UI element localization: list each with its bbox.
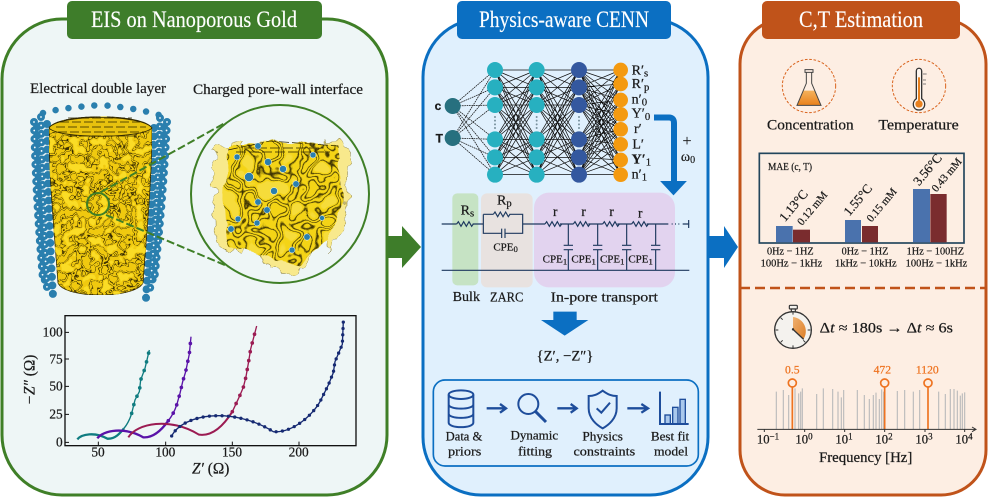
component labels: r bbox=[581, 204, 586, 219]
axis tick labels: 10 bbox=[875, 433, 888, 447]
bar value labels bbox=[776, 151, 945, 224]
icon: magnifier bbox=[518, 394, 546, 422]
output labels: Y′ bbox=[632, 107, 645, 122]
output labels: 0 bbox=[645, 112, 650, 123]
heading: EIS on Nanoporous Gold bbox=[67, 1, 322, 39]
panel: physics-aware CENN bbox=[423, 1, 708, 495]
region names: ZARC bbox=[490, 290, 523, 305]
arrow: circuit to impedance bbox=[541, 312, 588, 336]
axis tick labels: 3 bbox=[928, 431, 933, 441]
bars: concentration error bbox=[793, 194, 947, 242]
region: ZARC bbox=[481, 193, 533, 287]
hidden layer 2 bbox=[529, 62, 545, 183]
axis tick labels: 4 bbox=[968, 431, 973, 441]
output labels: 1 bbox=[646, 158, 651, 169]
arrow bbox=[627, 404, 648, 413]
output labels: R′ bbox=[632, 63, 644, 78]
axis tick labels: 150 bbox=[222, 445, 242, 460]
hidden layer 1 bbox=[487, 62, 503, 183]
axis tick labels: 25 bbox=[49, 407, 63, 422]
axis tick labels: 100 bbox=[155, 445, 176, 460]
workflow labels: priors bbox=[448, 445, 481, 459]
axis tick labels: 2 bbox=[888, 431, 893, 441]
frequency axis bbox=[757, 427, 976, 432]
workflow labels: Physics bbox=[582, 429, 623, 443]
output labels: 0 bbox=[642, 98, 647, 109]
panel: EIS on nanoporous gold bbox=[2, 1, 387, 495]
equivalent circuit: CPE bbox=[543, 254, 563, 266]
chart x labels: 0Hz − 1HZ bbox=[842, 246, 888, 257]
component labels: r bbox=[553, 204, 558, 219]
axis tick labels: 10 bbox=[835, 433, 848, 447]
workflow labels bbox=[446, 429, 690, 459]
arrow: outputs to circuit bbox=[654, 118, 680, 191]
output labels: r′ bbox=[634, 122, 642, 137]
chart x labels: 100Hz − 1kHz bbox=[906, 258, 968, 269]
output labels: R′ bbox=[632, 77, 644, 92]
icon: flask bbox=[782, 59, 836, 113]
axis tick labels bbox=[43, 325, 309, 460]
MAE bar chart: 0.12 mM bbox=[795, 189, 830, 228]
bar value labels: 1.55°C bbox=[840, 181, 875, 219]
component labels: R bbox=[497, 193, 506, 208]
chart x labels: 1Hz − 100HZ bbox=[907, 246, 964, 257]
icon: shield bbox=[589, 391, 617, 428]
fitting workflow bbox=[433, 380, 698, 466]
curve: teal bbox=[77, 350, 149, 439]
axis tick labels: 10 bbox=[955, 433, 968, 447]
label: concentration: Concentration bbox=[767, 118, 854, 134]
component labels: p bbox=[506, 198, 512, 209]
label: impedance output: {Z′, −Z″} bbox=[537, 348, 593, 364]
inset: charged pore-wall interface bbox=[191, 105, 369, 283]
selected frequency labels: 0.5 bbox=[785, 364, 800, 377]
axis tick labels: 200 bbox=[289, 445, 309, 460]
axis tick labels: 1 bbox=[848, 431, 853, 441]
axis tick labels: 0 bbox=[56, 435, 63, 450]
label: plus omega zero: + bbox=[682, 133, 692, 150]
nanoporous gold cylinder with ions bbox=[34, 105, 167, 298]
chart x labels bbox=[761, 246, 968, 269]
input labels bbox=[435, 99, 444, 145]
output labels: n′ bbox=[632, 167, 642, 182]
curve: crimson bbox=[128, 326, 257, 437]
label: plus omega zero bbox=[681, 133, 695, 166]
equivalent circuit: 1 bbox=[620, 256, 624, 266]
axis tick labels: 10 bbox=[757, 433, 770, 447]
selected frequency labels: 472 bbox=[874, 364, 891, 377]
component labels: R bbox=[461, 204, 470, 219]
chart x labels: 1kHz − 10kHz bbox=[835, 258, 897, 269]
axis title: Frequency [Hz] bbox=[819, 450, 912, 466]
region: bulk bbox=[452, 193, 478, 285]
region names bbox=[453, 290, 658, 306]
label: electrical double layer: Electrical double layer bbox=[30, 81, 166, 97]
axis tick labels: 10 bbox=[795, 433, 808, 447]
axis tick labels: −1 bbox=[770, 431, 779, 441]
workflow labels: model bbox=[654, 445, 689, 459]
heading: Physics-aware CENN bbox=[457, 1, 671, 39]
selected frequency labels bbox=[785, 364, 939, 377]
component labels: r bbox=[609, 204, 614, 219]
input labels: T bbox=[436, 131, 444, 145]
equivalent circuit: CPE bbox=[493, 241, 513, 253]
equivalent circuit: CPE bbox=[628, 254, 648, 266]
region: in-pore transport bbox=[534, 193, 675, 287]
equivalent circuit bbox=[442, 193, 689, 364]
bar value labels: 1.13°C bbox=[776, 187, 811, 224]
axis tick labels: 100 bbox=[43, 325, 63, 340]
equivalent circuit: 0 bbox=[513, 244, 518, 254]
input labels: c bbox=[435, 99, 442, 113]
output labels: n′ bbox=[632, 92, 642, 107]
equivalent circuit: CPE bbox=[600, 254, 620, 266]
workflow labels: constraints bbox=[573, 445, 635, 459]
label: plus omega zero: 0 bbox=[690, 155, 695, 166]
icon: bar chart bbox=[660, 392, 689, 424]
selected frequency stems bbox=[788, 379, 932, 429]
arrow bbox=[557, 404, 577, 413]
axis tick labels: 50 bbox=[49, 379, 63, 394]
component labels bbox=[461, 193, 643, 221]
equivalent circuit: 1 bbox=[563, 256, 567, 266]
Nyquist plot bbox=[21, 316, 356, 477]
output labels: 1 bbox=[642, 173, 647, 184]
label: measurement time reduction: Δt ≈ 180s → Δt ≈ 6s bbox=[820, 320, 953, 336]
input nodes bbox=[445, 98, 461, 146]
axis tick labels bbox=[757, 431, 973, 447]
output nodes bbox=[613, 63, 628, 182]
region names: Bulk bbox=[453, 290, 480, 305]
y axis label: −Z″ (Ω) bbox=[21, 355, 38, 405]
heading: C,T Estimation bbox=[762, 1, 960, 39]
component labels: r bbox=[638, 206, 643, 221]
panel: C,T estimation bbox=[740, 1, 986, 495]
axis tick labels: 0 bbox=[808, 431, 813, 441]
chart x labels: 100Hz − 1kHz bbox=[761, 258, 823, 269]
workflow labels: Dynamic bbox=[510, 429, 559, 443]
output labels: L′ bbox=[632, 138, 644, 153]
axis tick labels: 10 bbox=[915, 433, 928, 447]
icon: thermometer bbox=[892, 59, 946, 113]
frequency spectrum bbox=[757, 364, 976, 466]
chart x labels: 0Hz − 1HZ bbox=[767, 246, 814, 257]
axis tick labels: 50 bbox=[91, 445, 105, 460]
label: temperature: Temperature bbox=[878, 118, 959, 134]
heading: EIS on Nanoporous Gold: EIS on Nanoporous Gold bbox=[91, 7, 297, 32]
icon: stopwatch bbox=[775, 305, 811, 348]
x axis label: Z′ (Ω) bbox=[192, 460, 229, 477]
equivalent circuit: 1 bbox=[591, 256, 596, 266]
output labels: Y′ bbox=[632, 152, 646, 167]
chart title: MAE (c, T) bbox=[768, 162, 812, 173]
dashed zoom lines bbox=[101, 123, 232, 268]
region names: In-pore transport bbox=[551, 291, 658, 306]
bar value labels: 3.56°C bbox=[910, 151, 945, 188]
heading: Physics-aware CENN: Physics-aware CENN bbox=[479, 7, 649, 32]
hidden layer 3 bbox=[571, 62, 587, 183]
MAE bar chart bbox=[759, 151, 968, 269]
label: charged pore-wall interface: Charged pore-wall interface bbox=[193, 82, 363, 98]
heading: C,T Estimation: C,T Estimation bbox=[799, 7, 923, 32]
arrow: gold to CENN bbox=[388, 226, 421, 268]
component labels: s bbox=[470, 209, 474, 220]
icon: database bbox=[449, 390, 473, 427]
neural network bbox=[435, 62, 651, 184]
workflow labels: fitting bbox=[518, 444, 553, 458]
arrow: CENN to estimation bbox=[709, 226, 738, 268]
workflow labels: Best fit bbox=[651, 429, 690, 443]
label: plus omega zero: ω bbox=[681, 150, 690, 165]
output labels bbox=[632, 63, 651, 184]
curve: navy bbox=[172, 322, 343, 436]
MAE bar chart: 0.15 mM bbox=[864, 186, 900, 225]
selected frequency labels: 1120 bbox=[916, 364, 939, 377]
curve: purple bbox=[97, 337, 191, 438]
workflow labels: Data & bbox=[446, 429, 482, 443]
axis tick labels: 75 bbox=[49, 351, 63, 366]
output labels: p bbox=[644, 82, 649, 93]
grey candidate frequencies bbox=[776, 388, 965, 429]
arrow bbox=[487, 404, 506, 413]
equivalent circuit: 1 bbox=[648, 256, 653, 266]
MAE bar chart: 0.43 mM bbox=[929, 156, 965, 195]
output labels: s bbox=[644, 69, 648, 80]
equivalent circuit: CPE bbox=[571, 254, 591, 266]
bars: temperature error bbox=[776, 189, 930, 242]
